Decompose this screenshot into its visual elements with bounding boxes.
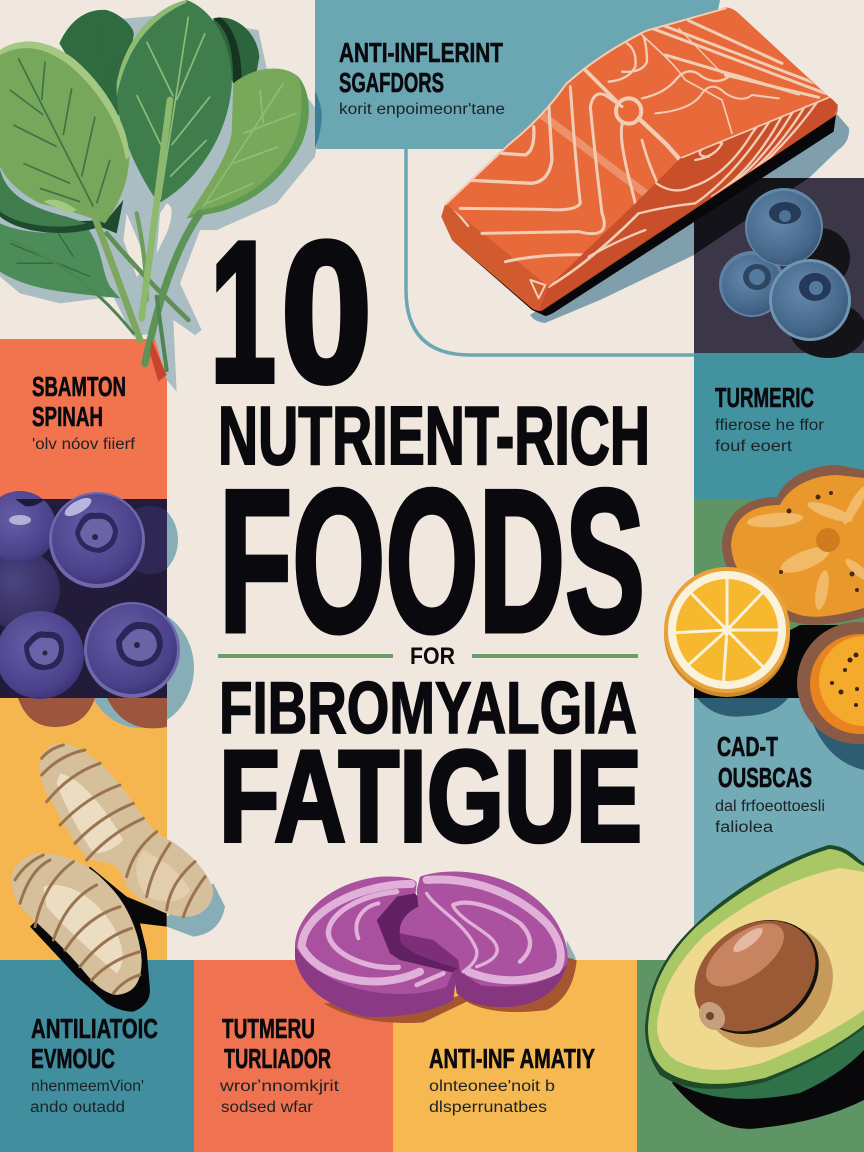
caption: turmeric second line: fouf eoert: [715, 438, 793, 455]
avocado pit shadow: [679, 899, 857, 1073]
heading: bottom coral second line: TURLIADOR: [224, 1043, 331, 1074]
berry: bottom right: [84, 602, 180, 698]
berry: right: [769, 259, 851, 341]
panel: bottom yellow label: [393, 960, 637, 1152]
ginger upper lobe: [40, 743, 213, 917]
caption: light teal: dal frfoeottoesli: [715, 798, 825, 815]
icon: avocado half: [645, 845, 864, 1129]
title: fatigue: FATIGUE: [219, 723, 642, 869]
icon: purple beet slices: [295, 871, 577, 1023]
connector line: [406, 149, 694, 355]
caption: bottom coral: wrorʼnnomkjrit: [219, 1078, 340, 1095]
heading: top panel: ANTI-INFLERINT: [339, 37, 503, 68]
caption: coral panel: 'olv nóov fiierf: [32, 436, 136, 453]
heading: bottom coral: TUTMERU: [222, 1013, 315, 1044]
heading: bottom teal: ANTILIATOIC: [31, 1013, 158, 1044]
pastry bowl: [722, 465, 864, 625]
heading: coral panel second line: SPINAH: [32, 401, 103, 432]
icon: salmon fillet: [441, 7, 849, 323]
berry: upper left: [0, 491, 56, 563]
title: fibromyalgia: FIBROMYALGIA: [219, 668, 637, 749]
heading: top panel second line: SGAFDORS: [339, 67, 444, 98]
title: [210, 201, 650, 869]
panel: coral spinach label: [0, 339, 167, 499]
berry: left: [719, 251, 785, 317]
title: 10: 0: [281, 201, 372, 424]
title rule left: [218, 654, 393, 658]
caption: bottom coral second line: sodsed wfar: [221, 1099, 313, 1116]
icon: turmeric pastry and citrus: [664, 465, 864, 770]
citrus slice: [664, 567, 790, 697]
heading: light teal: CAD-T: [717, 731, 778, 762]
berry: bottom left: [0, 611, 84, 699]
caption: bottom teal second line: ando outadd: [30, 1099, 125, 1116]
avocado pit: [673, 897, 841, 1057]
heading: light teal second line: OUSBCAS: [718, 762, 812, 793]
caption: turmeric: ffierose he ffor: [715, 417, 824, 434]
panel: bottom teal label: [0, 960, 194, 1152]
title: 10: 1: [210, 201, 276, 424]
icon: small blueberries: [719, 188, 864, 358]
heading: bottom teal second line: EVMOUC: [31, 1043, 115, 1074]
panel: light teal label: [694, 698, 864, 960]
heading: turmeric: TURMERIC: [715, 382, 814, 413]
title: nutrient-rich: NUTRIENT-RICH: [218, 389, 650, 482]
berry: top: [745, 188, 823, 266]
panel: top teal label panel: [315, 0, 720, 149]
icon: spinach bunch: [0, 0, 322, 392]
title: 10: [210, 201, 372, 424]
title rule right: [472, 654, 638, 658]
panel: yellow left: [0, 698, 167, 960]
caption: light teal second line: faliolea: [715, 819, 773, 836]
berry: top centre: [49, 492, 145, 588]
icon: ginger root: [12, 743, 225, 1012]
heading: coral panel: SBAMTON: [32, 371, 126, 402]
caption: bottom teal: nhenmeemVion': [31, 1078, 144, 1095]
panel: turmeric label: [694, 353, 864, 499]
sauce bowl: [797, 622, 864, 744]
panel: purple blueberries: [0, 491, 194, 728]
panel: dark blueberry square: [694, 178, 864, 353]
caption: top panel: korit enpoimeonr'tane: [339, 101, 505, 118]
berry: back right: [134, 506, 167, 574]
heading: bottom yellow: ANTI-INF AMATIY: [429, 1043, 595, 1074]
title: for: FOR: [410, 643, 455, 670]
caption: bottom yellow second line: dlsperrunatbes: [429, 1099, 547, 1116]
ginger lower lobe: [12, 853, 142, 995]
berry: back left: [0, 550, 60, 630]
panel: green behind pastry: [694, 499, 864, 699]
caption: bottom yellow: olnteonee'noit b: [429, 1078, 555, 1095]
panel: bottom right green: [637, 960, 864, 1152]
panel: bottom coral label: [194, 960, 393, 1152]
